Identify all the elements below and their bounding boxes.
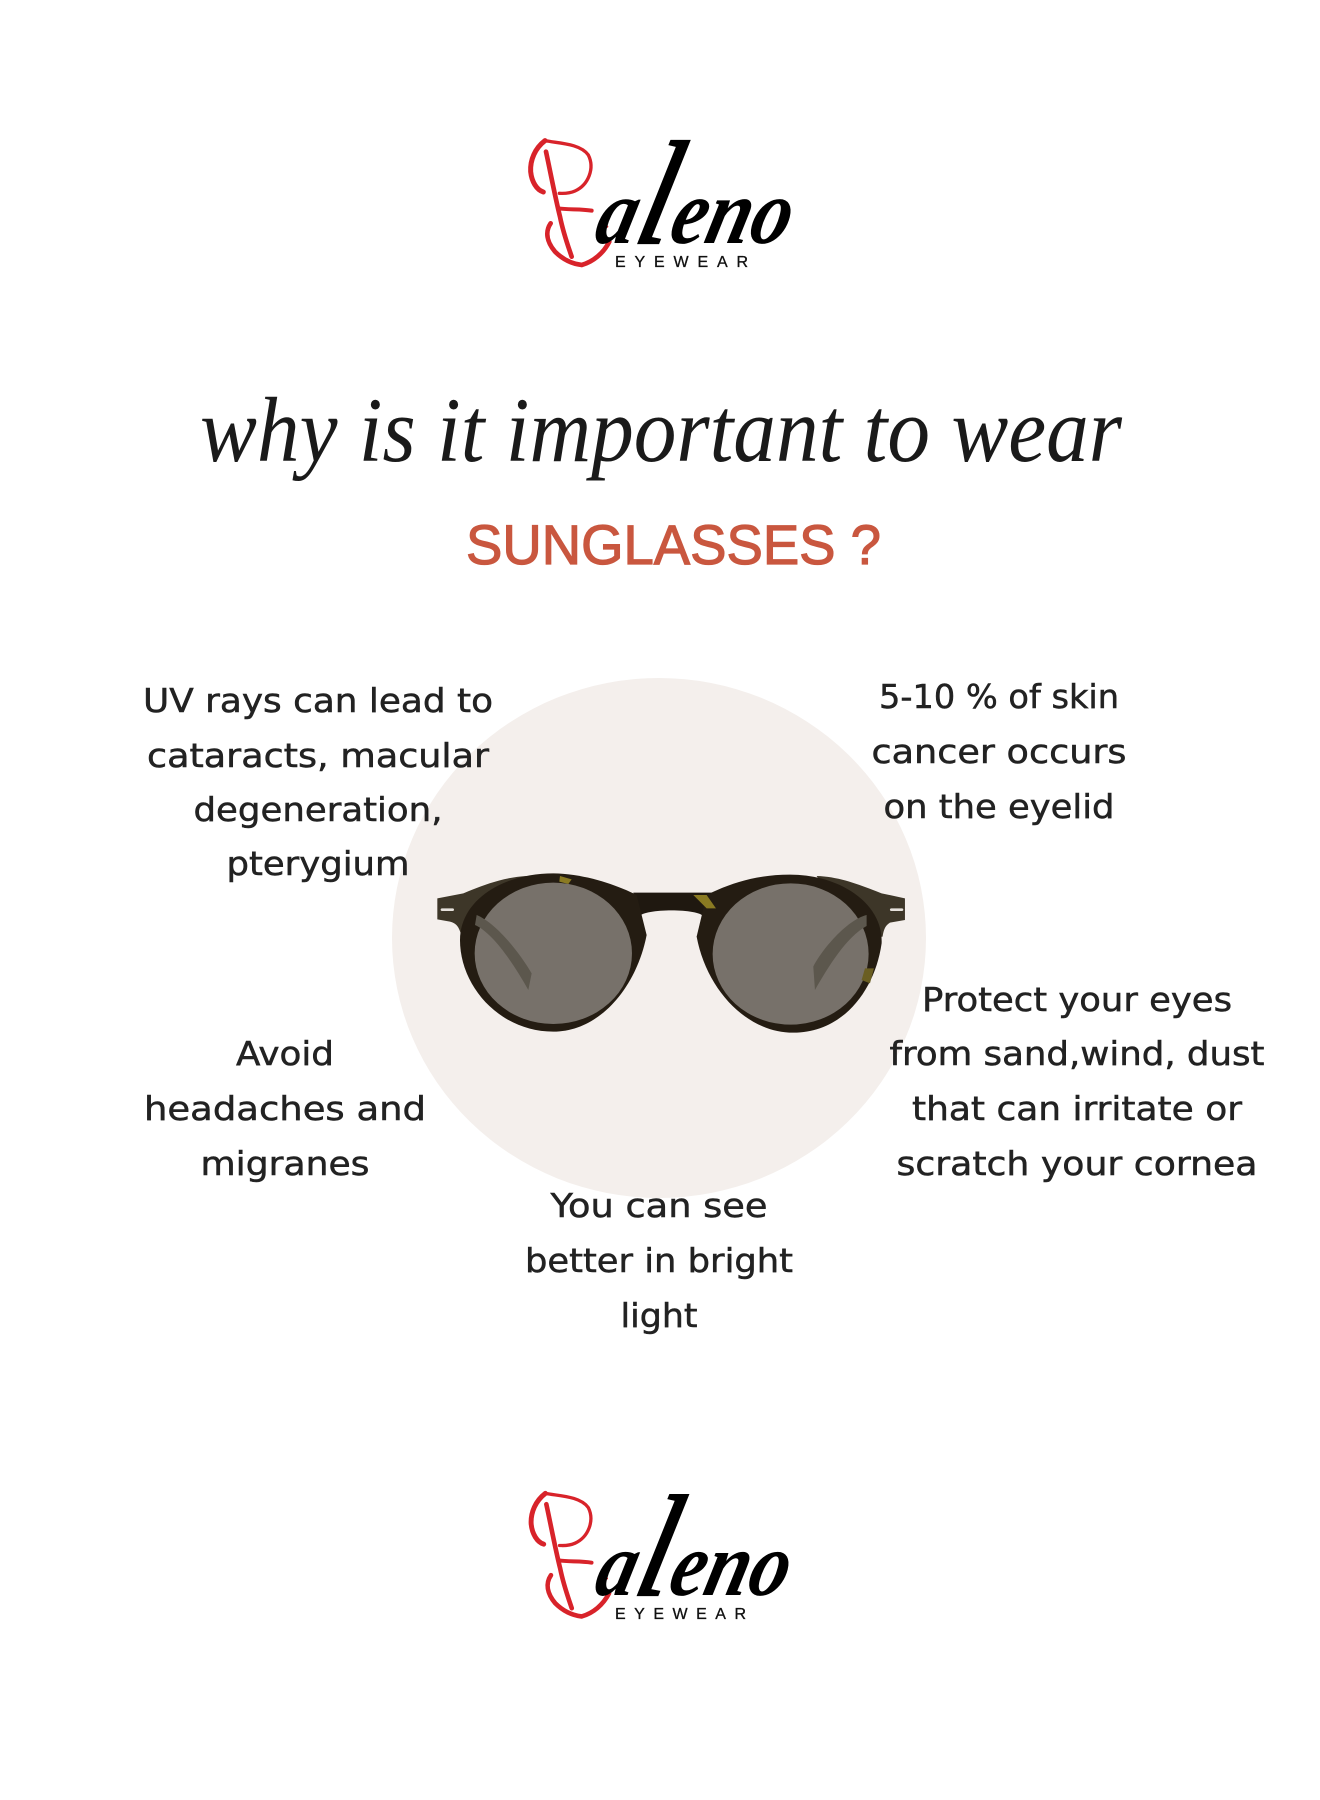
right temple <box>817 876 905 940</box>
text: protect eyes: from sand,wind, dust <box>890 1034 1265 1073</box>
text: protect eyes: Protect your eyes <box>922 980 1232 1019</box>
logo: bottom Baleno Eyewear <box>531 1468 816 1627</box>
text: see better <box>525 1186 793 1335</box>
right frame <box>697 875 882 1033</box>
icon: red glasses monogram <box>531 1493 609 1616</box>
text: see better: better in bright <box>525 1241 793 1280</box>
text: skin cancer: on the eyelid <box>884 787 1114 826</box>
icon: red glasses monogram <box>531 141 609 265</box>
left lens <box>475 883 632 1024</box>
text: UV rays: degeneration, <box>194 790 442 829</box>
heading: SUNGLASSES: SUNGLASSES ? <box>466 513 881 576</box>
logo wordmark: aleno <box>584 1468 816 1627</box>
text: UV rays: cataracts, macular <box>147 736 489 775</box>
text: avoid headaches: migranes <box>200 1144 370 1183</box>
text: UV rays: pterygium <box>226 844 410 883</box>
logo tagline: EYEWEAR <box>615 254 748 271</box>
text: protect eyes: scratch your cornea <box>896 1144 1258 1183</box>
bridge <box>633 893 713 917</box>
right lens <box>713 883 869 1025</box>
logo tagline: EYEWEAR <box>615 1606 746 1623</box>
text: skin cancer <box>872 677 1126 826</box>
background circle <box>392 678 926 1198</box>
title: script heading: why is it important to wear <box>200 379 1123 481</box>
logo: top Baleno Eyewear <box>531 112 819 275</box>
rivets <box>441 908 454 911</box>
text: protect eyes: that can irritate or <box>912 1089 1242 1128</box>
text: skin cancer: 5-10 % of skin <box>879 677 1119 716</box>
text: avoid headaches: headaches and <box>144 1089 426 1128</box>
text: UV rays: UV rays can lead to <box>143 681 493 720</box>
tortoise spots <box>559 876 572 884</box>
text: see better: You can see <box>549 1186 768 1225</box>
text: avoid headaches <box>144 1034 426 1183</box>
text: skin cancer: cancer occurs <box>872 732 1126 771</box>
left frame <box>460 873 647 1032</box>
logo wordmark: aleno <box>584 112 819 275</box>
text: avoid headaches: Avoid <box>236 1034 334 1073</box>
text: see better: light <box>620 1296 698 1335</box>
text: protect eyes <box>890 980 1265 1183</box>
temple reflection <box>475 915 532 990</box>
illustration: sunglasses <box>437 873 905 1033</box>
text: UV rays <box>143 681 493 883</box>
left temple <box>437 876 527 940</box>
